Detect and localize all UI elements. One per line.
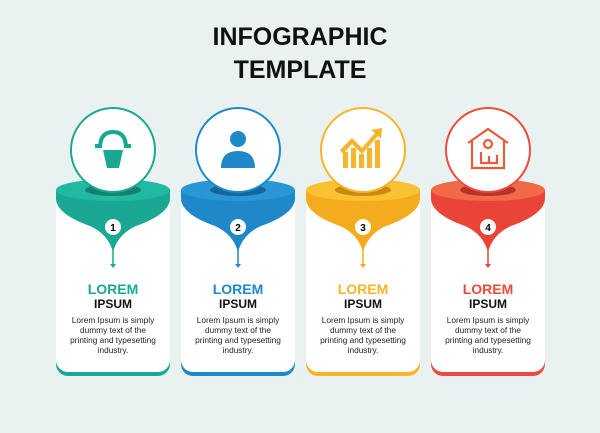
panel: step 3: printing and typesetting [320,335,406,345]
panel: step 4: printing and typesetting [445,335,531,345]
icon: growth chart [340,128,382,168]
panel: step 2: LOREM [213,281,263,297]
panel: step 2 [181,108,295,376]
panel: step 3: Lorem Ipsum is simply [322,315,405,325]
panel: step 1 [56,108,170,376]
panel: step 4 [431,108,545,376]
title: INFOGRAPHIC [212,23,388,51]
panel: step 1: Lorem Ipsum is simply [72,315,155,325]
panel: step 2: Lorem Ipsum is simply [197,315,280,325]
icon: user [221,131,255,168]
panel: step 3 [306,108,420,376]
panel: step 4: 4 [485,223,491,234]
panel: step 3: LOREM [338,281,388,297]
panel: step 2: IPSUM [219,297,257,311]
panel: step 1: industry. [98,345,128,355]
panel: step 4: Lorem Ipsum is simply [447,315,530,325]
panel: step 1: LOREM [88,281,138,297]
panel: step 3: 3 [360,223,366,234]
icon: house [468,129,508,168]
panel: step 3: dummy text of the [330,325,396,335]
panel: step 1: 1 [110,223,116,234]
panel: step 2: dummy text of the [205,325,271,335]
panel: step 2: 2 [235,223,241,234]
panel: step 4: IPSUM [469,297,507,311]
panel: step 2: industry. [223,345,253,355]
title: TEMPLATE [234,56,366,84]
panel: step 1: dummy text of the [80,325,146,335]
panel: step 4: dummy text of the [455,325,521,335]
panel: step 1: IPSUM [94,297,132,311]
panel: step 3: industry. [348,345,378,355]
icon: lightbulb [95,132,131,148]
panel: step 1: printing and typesetting [70,335,156,345]
panel: step 4: LOREM [463,281,513,297]
panel: step 4: industry. [473,345,503,355]
title [212,23,388,84]
panel: step 2: printing and typesetting [195,335,281,345]
panel: step 3: IPSUM [344,297,382,311]
